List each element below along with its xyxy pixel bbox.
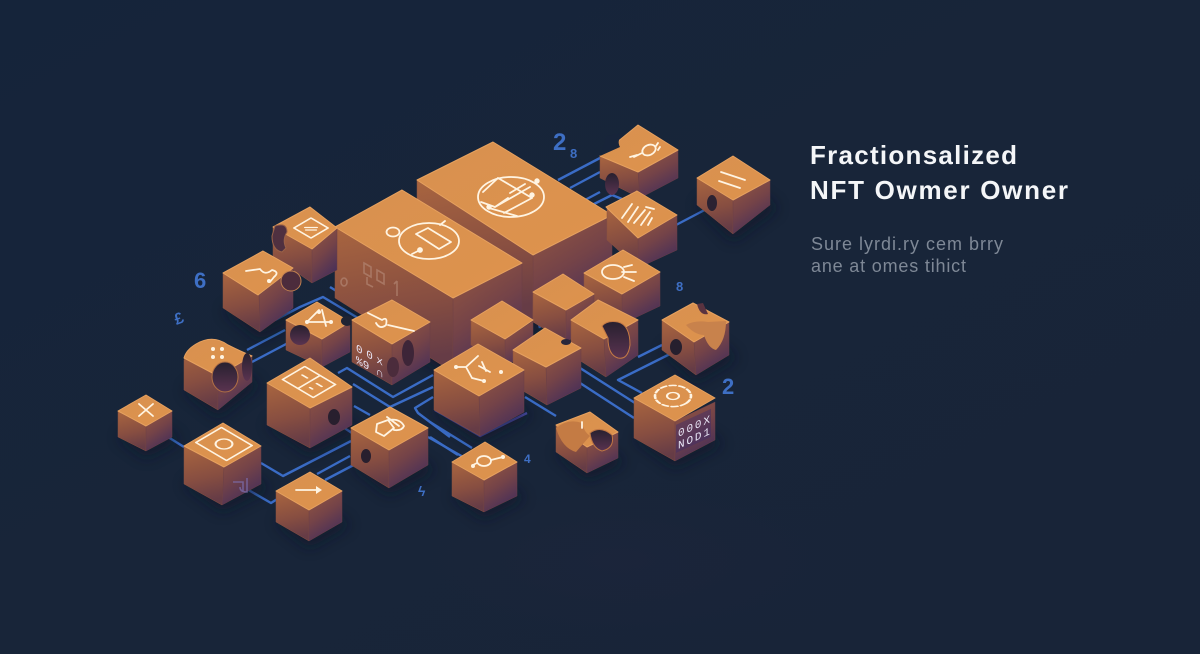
cube: small x (118, 395, 172, 451)
icon: globe grid (478, 177, 544, 217)
cube: plain notch (513, 328, 581, 405)
icon: bulb (630, 143, 660, 157)
number labels: 2 (553, 129, 566, 156)
cube: plain small 2 (471, 301, 533, 366)
number labels: 4 (524, 452, 531, 466)
subtitle line 2: ane at omes tihict (811, 256, 966, 276)
cube: data cube (352, 300, 430, 385)
data label (676, 409, 711, 454)
connection circuit lines (160, 158, 716, 503)
cube: fish icon (351, 407, 428, 488)
data label (356, 342, 383, 382)
title line 2: NFT Owmer Owner (810, 175, 1068, 205)
cube: broken hollow (556, 412, 618, 473)
puzzle notch (600, 133, 624, 156)
cube: face icon (584, 250, 660, 324)
data label: %9 ∩ (356, 354, 383, 382)
cube: circle node (452, 442, 517, 512)
icon: gear (648, 381, 698, 411)
cube: hook icon (223, 251, 301, 332)
cube: columns icon (606, 191, 677, 268)
cube: notch puzzle (571, 300, 638, 377)
cube: hollow heart (662, 303, 729, 375)
cube: gear with data (634, 375, 715, 461)
cube: bone icon (697, 156, 770, 234)
data label: 00x (356, 342, 383, 370)
cube: screen icon (184, 423, 261, 505)
cube: plain small 1 (533, 274, 594, 342)
cube: arrow (276, 472, 342, 541)
puzzle notch (290, 325, 310, 345)
puzzle notch (281, 271, 301, 291)
number labels: 8 (570, 146, 577, 161)
puzzle notch (602, 322, 630, 358)
number labels (172, 129, 734, 499)
title: Fractionsalized (810, 140, 1017, 170)
cube: node cross (286, 302, 353, 367)
big block: right (417, 142, 612, 322)
cube: rounded dots (184, 339, 252, 410)
cube shadows (118, 180, 778, 548)
icon: small ring (386, 228, 400, 236)
data label: NOD1 (678, 426, 710, 453)
cube: top-left puzzle (272, 207, 337, 283)
face glyphs (341, 263, 397, 296)
cube: card icon (267, 358, 352, 448)
cube: bulb (600, 125, 678, 198)
subtitle line 1: Sure lyrdi.ry cem brry (811, 234, 1003, 254)
number labels: 8 (676, 279, 683, 294)
number labels: 6 (194, 268, 206, 293)
data label: 000X (678, 414, 710, 441)
cube: chart node (434, 344, 524, 436)
puzzle notch (272, 225, 287, 252)
big block: left (335, 190, 522, 372)
number labels: £ (172, 310, 186, 329)
number labels: ϟ (418, 483, 426, 499)
icon: dial circle (399, 221, 459, 259)
number labels: 2 (722, 374, 734, 399)
